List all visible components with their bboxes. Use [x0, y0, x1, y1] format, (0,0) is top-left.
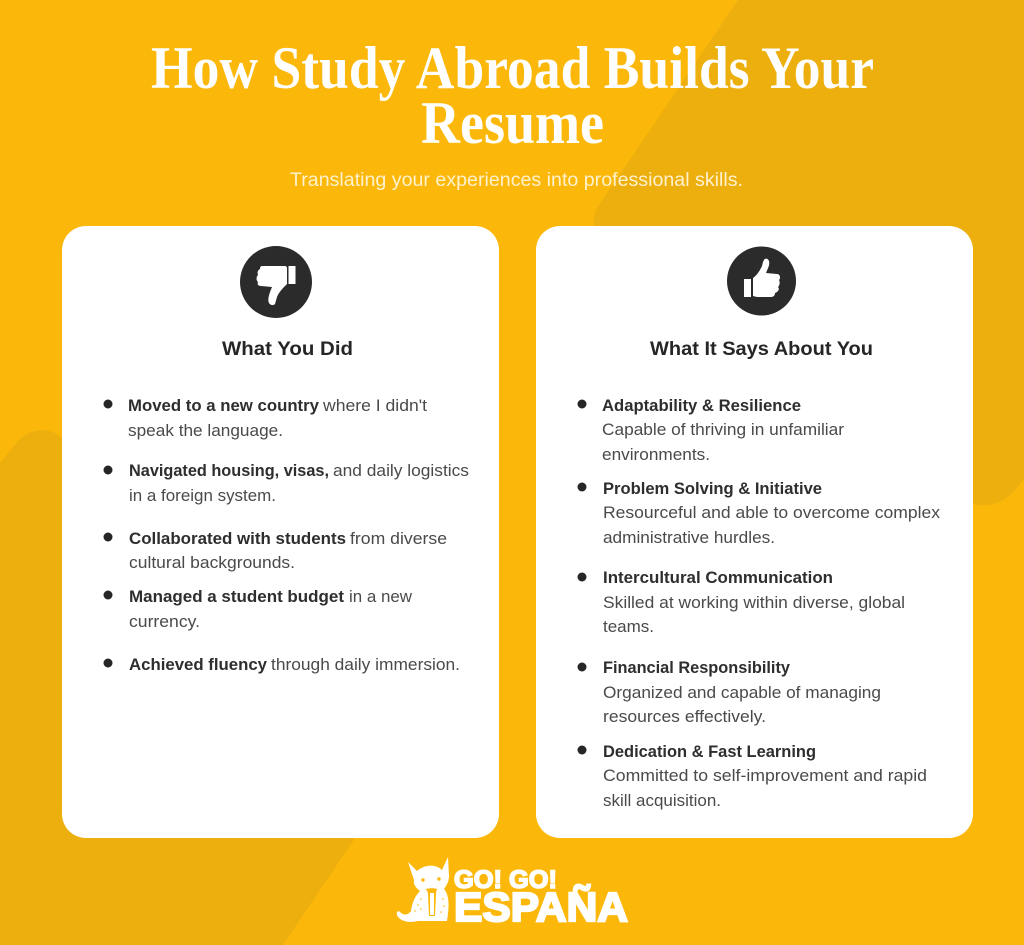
list: activities: and daily logistics — [333, 461, 469, 480]
list: skills: skill acquisition. — [603, 791, 721, 810]
list: activities: Collaborated with students — [129, 529, 346, 548]
list: activities: through daily immersion. — [271, 655, 460, 674]
panel: what it says about you — [536, 226, 973, 838]
list: skills — [578, 396, 941, 810]
title — [151, 35, 874, 156]
icon: lynx mascot — [397, 857, 449, 922]
subtitle: Translating your experiences into professional skills. — [290, 170, 743, 191]
list: skills: Intercultural Communication — [603, 568, 833, 587]
list: activities: Managed a student budget — [129, 587, 344, 606]
list: skills: resources effectively. — [603, 707, 766, 726]
list: activities: Achieved fluency — [129, 655, 268, 674]
list: skills: Skilled at working within diverse, global — [603, 593, 905, 612]
heading: what you did: What You Did — [222, 338, 353, 360]
list: activities: from diverse — [350, 529, 447, 548]
logo: Go! Go! España — [397, 857, 628, 930]
list: skills: Committed to self-improvement and rapid — [603, 766, 927, 785]
list: skills: administrative hurdles. — [603, 528, 775, 547]
list: activities: currency. — [129, 612, 200, 631]
list: activities: Navigated housing, visas, — [129, 461, 329, 480]
list: activities: speak the language. — [128, 421, 283, 440]
title: Resume — [421, 90, 604, 156]
list: activities: in a foreign system. — [129, 486, 276, 505]
heading: what it says about you: What It Says About You — [650, 338, 873, 360]
list: skills: Problem Solving & Initiative — [603, 479, 822, 498]
logo text: GO! GO!: GO! GO! — [454, 866, 557, 894]
list: activities: Moved to a new country — [128, 396, 320, 415]
logo text: ESPAÑA: ESPAÑA — [454, 884, 628, 930]
list: skills: Organized and capable of managing — [603, 683, 881, 702]
list: activities — [104, 396, 469, 674]
icon: thumbs down — [240, 246, 312, 318]
list: activities: where I didn't — [322, 396, 427, 415]
list: skills: environments. — [602, 445, 710, 464]
list: skills: Capable of thriving in unfamiliar — [602, 420, 844, 439]
list: skills: teams. — [603, 617, 654, 636]
list: activities: cultural backgrounds. — [129, 553, 295, 572]
list: skills: Adaptability & Resilience — [602, 396, 801, 415]
list: skills: Financial Responsibility — [603, 658, 791, 677]
title: How Study Abroad Builds Your — [151, 35, 874, 101]
list: skills: Dedication & Fast Learning — [603, 742, 816, 761]
list: activities: in a new — [349, 587, 413, 606]
icon: thumbs up — [727, 246, 796, 316]
list: skills: Resourceful and able to overcome complex — [603, 503, 941, 522]
panel: what you did — [62, 226, 499, 838]
